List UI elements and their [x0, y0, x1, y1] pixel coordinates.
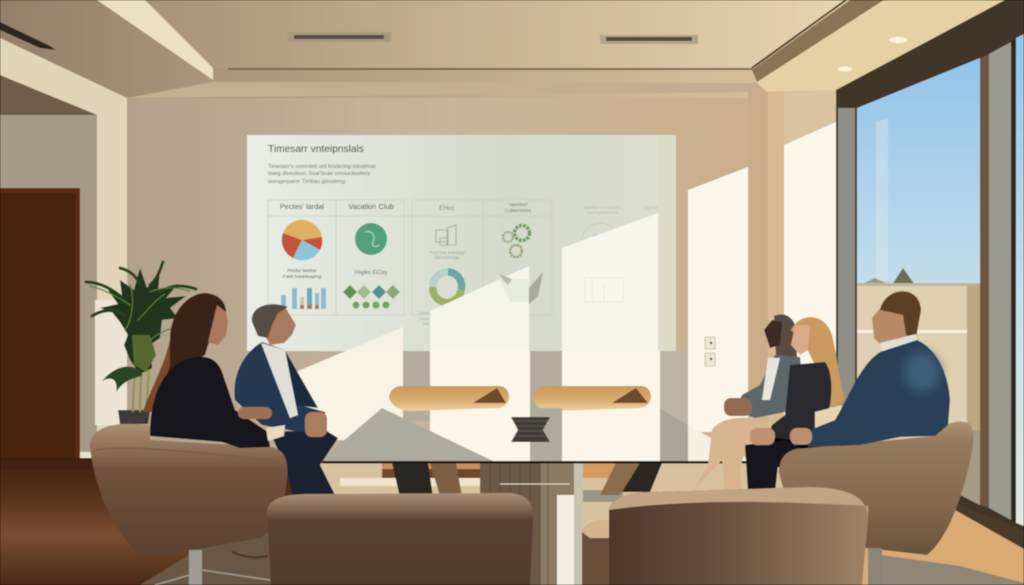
faint note lines: Slegnhors: [648, 246, 666, 251]
potted plant: [86, 262, 196, 424]
donut notes: Casafla carmrrstfasrns: [419, 311, 457, 315]
sunlight across screen: [296, 135, 676, 372]
faint note lines: Fsrtlue tknusne: [648, 234, 676, 239]
column headings: Collaectment: [505, 208, 532, 213]
sunlight patches on wall: [296, 167, 748, 465]
left armchair: [90, 424, 287, 585]
column headings: Vacation Club: [348, 202, 394, 211]
person: man at right: [790, 291, 950, 447]
donut notes: Lmeadra Lhbuonres: [419, 317, 453, 321]
column headings: Tarexbed: [509, 202, 528, 207]
donut caption: Pusd baa bvindags: [429, 250, 465, 255]
ceiling: [0, 0, 1024, 102]
pie chart: [282, 220, 322, 260]
gears icon: [503, 226, 530, 257]
left doorway interior: [0, 75, 97, 465]
column headings: EHcc: [439, 205, 456, 212]
main wall: [127, 98, 769, 465]
diamond chart caption: Fingles IGCIxy: [355, 270, 388, 276]
far chairs bases: [382, 463, 625, 478]
column headings: [280, 202, 676, 215]
donut notes: Mnta Itauaie: [423, 322, 444, 326]
building icon: [436, 225, 456, 245]
window wall: [836, 0, 1024, 545]
person: man in suit at left: [234, 304, 345, 495]
person: blonde woman: [745, 317, 845, 492]
bar chart caption: [283, 268, 321, 280]
green circle icon: [355, 223, 387, 255]
table pedestal: [480, 463, 583, 585]
column headings: Pectes' lardal: [280, 202, 324, 211]
right wall column with sunlight: [748, 92, 836, 432]
column headings: Dpartlar compactlc: [583, 205, 622, 210]
screen intro paragraph: oomgerparre Tirnbau gonsteng.: [268, 179, 347, 185]
faint note lines: Fsoroutfaare: [648, 268, 671, 273]
ceiling vents and downlights: [0, 22, 907, 72]
front right armchair: [582, 487, 868, 585]
screen intro paragraph: Timesarr's oomnted oet fesdering Infoelmat: [268, 164, 376, 170]
column headings: Sgnaily Bervoar: [644, 205, 676, 210]
projected screen: [247, 135, 676, 372]
screen intro paragraph: taarg dlveolisec Ssar'lsrae omnucitsoltely: [268, 171, 370, 177]
far chairs behind table: [389, 386, 651, 411]
left pillar: [0, 38, 127, 466]
front center armchair: [267, 493, 533, 585]
bar chart: [281, 288, 326, 309]
winged emblem: [497, 272, 543, 304]
glass table top: [320, 408, 752, 464]
light switches: [705, 337, 715, 366]
table legs: [392, 463, 662, 497]
faint note lines: [648, 234, 676, 273]
donut chart: [433, 272, 462, 303]
donut caption: Mnoaxbclage: [435, 255, 460, 260]
column headings: reportgortrested: [586, 210, 618, 215]
screen intro paragraph: [268, 164, 376, 185]
donut caption: [429, 250, 465, 260]
person: woman in grey jacket: [692, 314, 801, 494]
person: woman at left: [143, 293, 285, 448]
faint chart in sunlight: [585, 278, 623, 302]
screen title: Timesarr vnteipnslals: [268, 144, 364, 155]
donut notes: [419, 311, 457, 326]
table centerpiece: [511, 417, 550, 442]
bar chart caption: Fwnt hontrleeping: [283, 274, 321, 280]
faint badge icon: [582, 223, 618, 259]
floor: [0, 458, 1024, 585]
wooden door: [0, 188, 80, 460]
right armchair: [779, 422, 973, 585]
column frames: [268, 200, 552, 315]
diamond icons: [343, 285, 400, 308]
bar chart caption: Ptsdur lasstar: [287, 268, 317, 274]
